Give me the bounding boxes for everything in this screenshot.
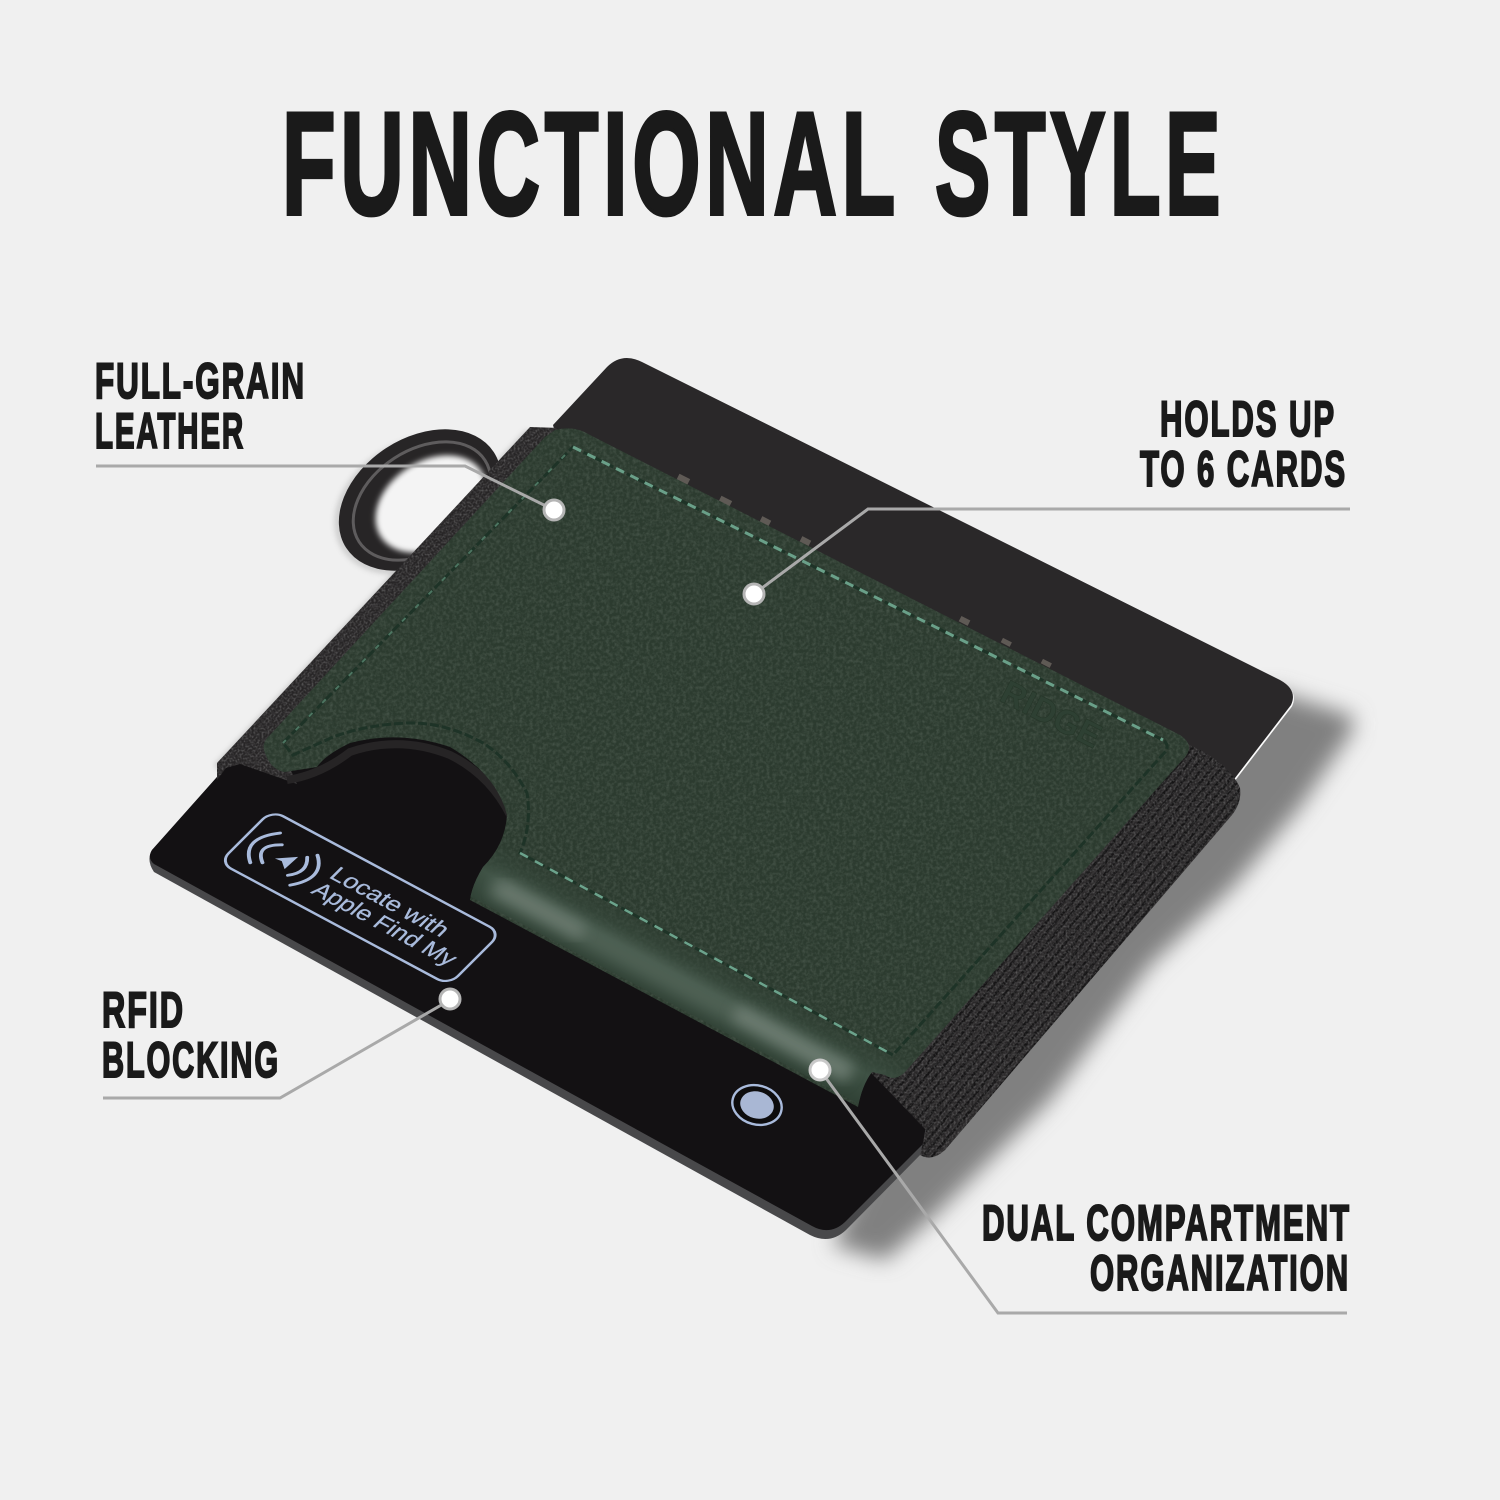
callout: dual compartment organization xyxy=(810,1060,1351,1313)
badge text: Apple Find My xyxy=(306,878,464,970)
back card xyxy=(553,358,1294,902)
callout: holds up to 6 cards xyxy=(744,391,1350,604)
front card xyxy=(149,690,930,1239)
drop shadow xyxy=(217,412,1353,1260)
key ring xyxy=(312,400,528,600)
title: STYLE xyxy=(935,82,1225,245)
wallet product photo xyxy=(149,358,1353,1260)
callout: full-grain leather: FULL-GRAIN xyxy=(95,353,306,409)
leather fold highlight xyxy=(470,856,902,1104)
callout: full-grain leather: LEATHER xyxy=(95,403,245,459)
callout: full-grain leather xyxy=(95,353,564,520)
callout: dual compartment organization: ORGANIZATION xyxy=(1090,1245,1350,1301)
icon: find my signal arrow xyxy=(239,827,329,890)
callout: rfid blocking: BLOCKING xyxy=(102,1032,280,1088)
badge text xyxy=(306,861,480,970)
title: FUNCTIONAL xyxy=(282,82,900,245)
badge: locate with apple find my xyxy=(219,810,501,985)
card button xyxy=(728,1080,786,1130)
debossed logo: RIDGE xyxy=(994,673,1108,756)
callout: holds up to 6 cards: HOLDS UP xyxy=(1160,391,1336,447)
callout: holds up to 6 cards: TO 6 CARDS xyxy=(1140,441,1347,497)
callout: rfid blocking: RFID xyxy=(102,982,185,1038)
elastic band: left side xyxy=(217,427,560,815)
callout: rfid blocking xyxy=(102,982,460,1098)
elastic band: right side xyxy=(800,700,1240,1158)
badge text: Locate with xyxy=(324,862,456,941)
leather sleeve xyxy=(264,428,1189,1115)
